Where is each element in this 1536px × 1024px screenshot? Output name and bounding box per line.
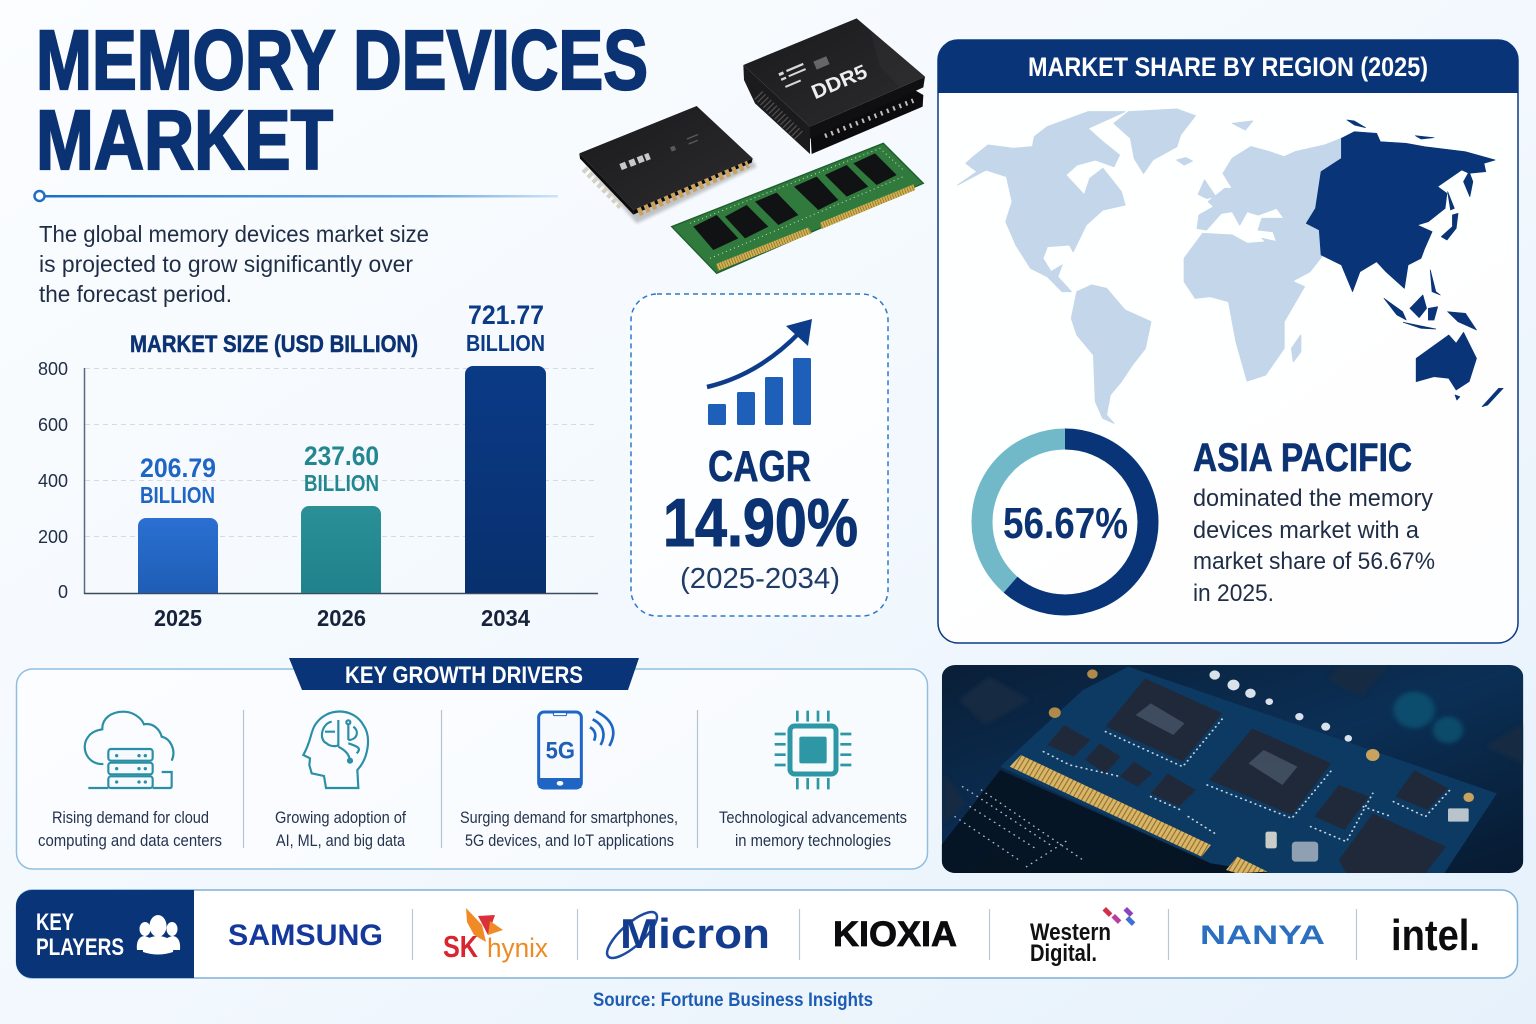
bar 2034: 721.77 bbox=[468, 300, 544, 330]
y axis labels: 0 bbox=[58, 582, 68, 602]
bar 2026: 2026 bbox=[317, 605, 366, 631]
chip: DDR5 package bbox=[743, 18, 925, 154]
bar 2026 bbox=[301, 441, 381, 631]
driver text: Growing adoption of bbox=[275, 809, 406, 827]
illustration: memory chips and RAM module bbox=[579, 18, 925, 273]
icon: 5G phone bbox=[539, 711, 613, 788]
driver text: Surging demand for smartphones, bbox=[460, 809, 678, 827]
intro text: The global memory devices market size bbox=[39, 221, 429, 247]
region description: dominated the memory bbox=[1193, 485, 1433, 512]
bar 2026: 237.60 bbox=[304, 441, 379, 471]
CAGR label: CAGR bbox=[708, 442, 811, 491]
driver: AI bbox=[275, 711, 406, 850]
region header bbox=[938, 40, 1518, 93]
panel heading tab bbox=[289, 658, 639, 690]
y axis labels: 400 bbox=[38, 471, 68, 491]
title rule bbox=[34, 191, 558, 201]
bar 2034: 2034 bbox=[481, 605, 530, 631]
y axis labels: 600 bbox=[38, 415, 68, 435]
photo: memory module on circuit board bbox=[940, 665, 1523, 873]
icon: rising bars with arrow bbox=[707, 319, 812, 425]
title: MARKET bbox=[36, 93, 333, 187]
intro text: is projected to grow significantly over bbox=[39, 251, 413, 277]
logo: Micron: Micron bbox=[620, 910, 770, 957]
driver text: 5G devices, and IoT applications bbox=[465, 832, 674, 850]
bar 2034 bbox=[465, 300, 546, 631]
logo: Western Digital: Digital. bbox=[1030, 940, 1097, 967]
source: Source: Fortune Business Insights bbox=[593, 990, 873, 1011]
panel heading tab: KEY GROWTH DRIVERS bbox=[345, 662, 583, 689]
key players label: PLAYERS bbox=[36, 934, 124, 961]
region description bbox=[1193, 485, 1435, 607]
logo: SK hynix: SK bbox=[443, 929, 478, 964]
icon: AI head bbox=[303, 711, 368, 788]
region description: market share of 56.67% bbox=[1193, 548, 1435, 575]
title: MEMORY DEVICES bbox=[36, 13, 648, 107]
driver: cloud bbox=[38, 712, 222, 850]
driver text: in memory technologies bbox=[735, 832, 891, 850]
chip: flat package bbox=[579, 106, 757, 223]
donut chart: 56.67% bbox=[1003, 499, 1128, 548]
logo: SK hynix bbox=[443, 908, 548, 964]
key players label bbox=[16, 890, 194, 978]
driver text bbox=[460, 809, 678, 850]
driver text: computing and data centers bbox=[38, 832, 222, 850]
driver text: Technological advancements bbox=[719, 809, 907, 827]
logo: Samsung: SAMSUNG bbox=[228, 919, 383, 952]
bar 2025: BILLION bbox=[140, 482, 215, 508]
RAM module bbox=[672, 143, 923, 273]
region description: devices market with a bbox=[1193, 517, 1420, 544]
panel: market share by region bbox=[938, 40, 1518, 643]
logo: Western Digital bbox=[1030, 907, 1135, 967]
y axis labels bbox=[38, 359, 68, 602]
logo: SK hynix: hynix bbox=[487, 933, 548, 963]
panel: key growth drivers bbox=[16, 658, 928, 869]
bar 2026: BILLION bbox=[304, 470, 379, 496]
chart heading: MARKET SIZE (USD BILLION) bbox=[130, 331, 418, 358]
chip marking: DDR5 bbox=[808, 61, 871, 104]
region header: MARKET SHARE BY REGION (2025) bbox=[1028, 52, 1428, 82]
logo: Intel: intel. bbox=[1391, 911, 1480, 960]
bar 2025 bbox=[138, 453, 218, 631]
y axis labels: 800 bbox=[38, 359, 68, 379]
driver text bbox=[275, 809, 406, 850]
panel: key players bbox=[16, 890, 1518, 978]
driver: memory technology bbox=[719, 711, 907, 850]
y axis labels: 200 bbox=[38, 527, 68, 547]
driver: 5G bbox=[460, 711, 678, 850]
intro text: the forecast period. bbox=[39, 281, 232, 307]
CAGR period: (2025-2034) bbox=[680, 563, 840, 595]
logo: Kioxia: KIOXIA bbox=[833, 915, 957, 954]
icon: processor chip bbox=[775, 711, 851, 789]
region description: in 2025. bbox=[1193, 580, 1274, 607]
icon: cloud server bbox=[85, 712, 173, 788]
driver text bbox=[38, 809, 222, 850]
bar 2025: 206.79 bbox=[140, 453, 216, 483]
logo: Nanya: NANYA bbox=[1200, 920, 1325, 950]
driver text: Rising demand for cloud bbox=[52, 809, 209, 827]
panel: CAGR bbox=[631, 294, 888, 616]
icon: people bbox=[137, 915, 180, 954]
logo: Western Digital: Western bbox=[1030, 919, 1111, 946]
CAGR value: 14.90% bbox=[663, 485, 858, 561]
Asia Pacific highlight bbox=[1306, 120, 1503, 407]
intro text bbox=[39, 221, 429, 307]
icon: 5G phone: 5G bbox=[546, 737, 575, 764]
rest of world bbox=[958, 109, 1341, 423]
bar 2025: 2025 bbox=[154, 605, 202, 631]
bar chart bbox=[38, 300, 598, 631]
logo: Micron bbox=[601, 905, 770, 965]
driver text bbox=[719, 809, 907, 850]
world map bbox=[958, 109, 1503, 423]
key players label: KEY bbox=[36, 909, 74, 936]
title bbox=[36, 13, 648, 187]
bar 2034: BILLION bbox=[466, 330, 545, 356]
region heading: ASIA PACIFIC bbox=[1193, 436, 1412, 480]
driver text: AI, ML, and big data bbox=[276, 832, 406, 850]
donut chart bbox=[982, 439, 1148, 605]
